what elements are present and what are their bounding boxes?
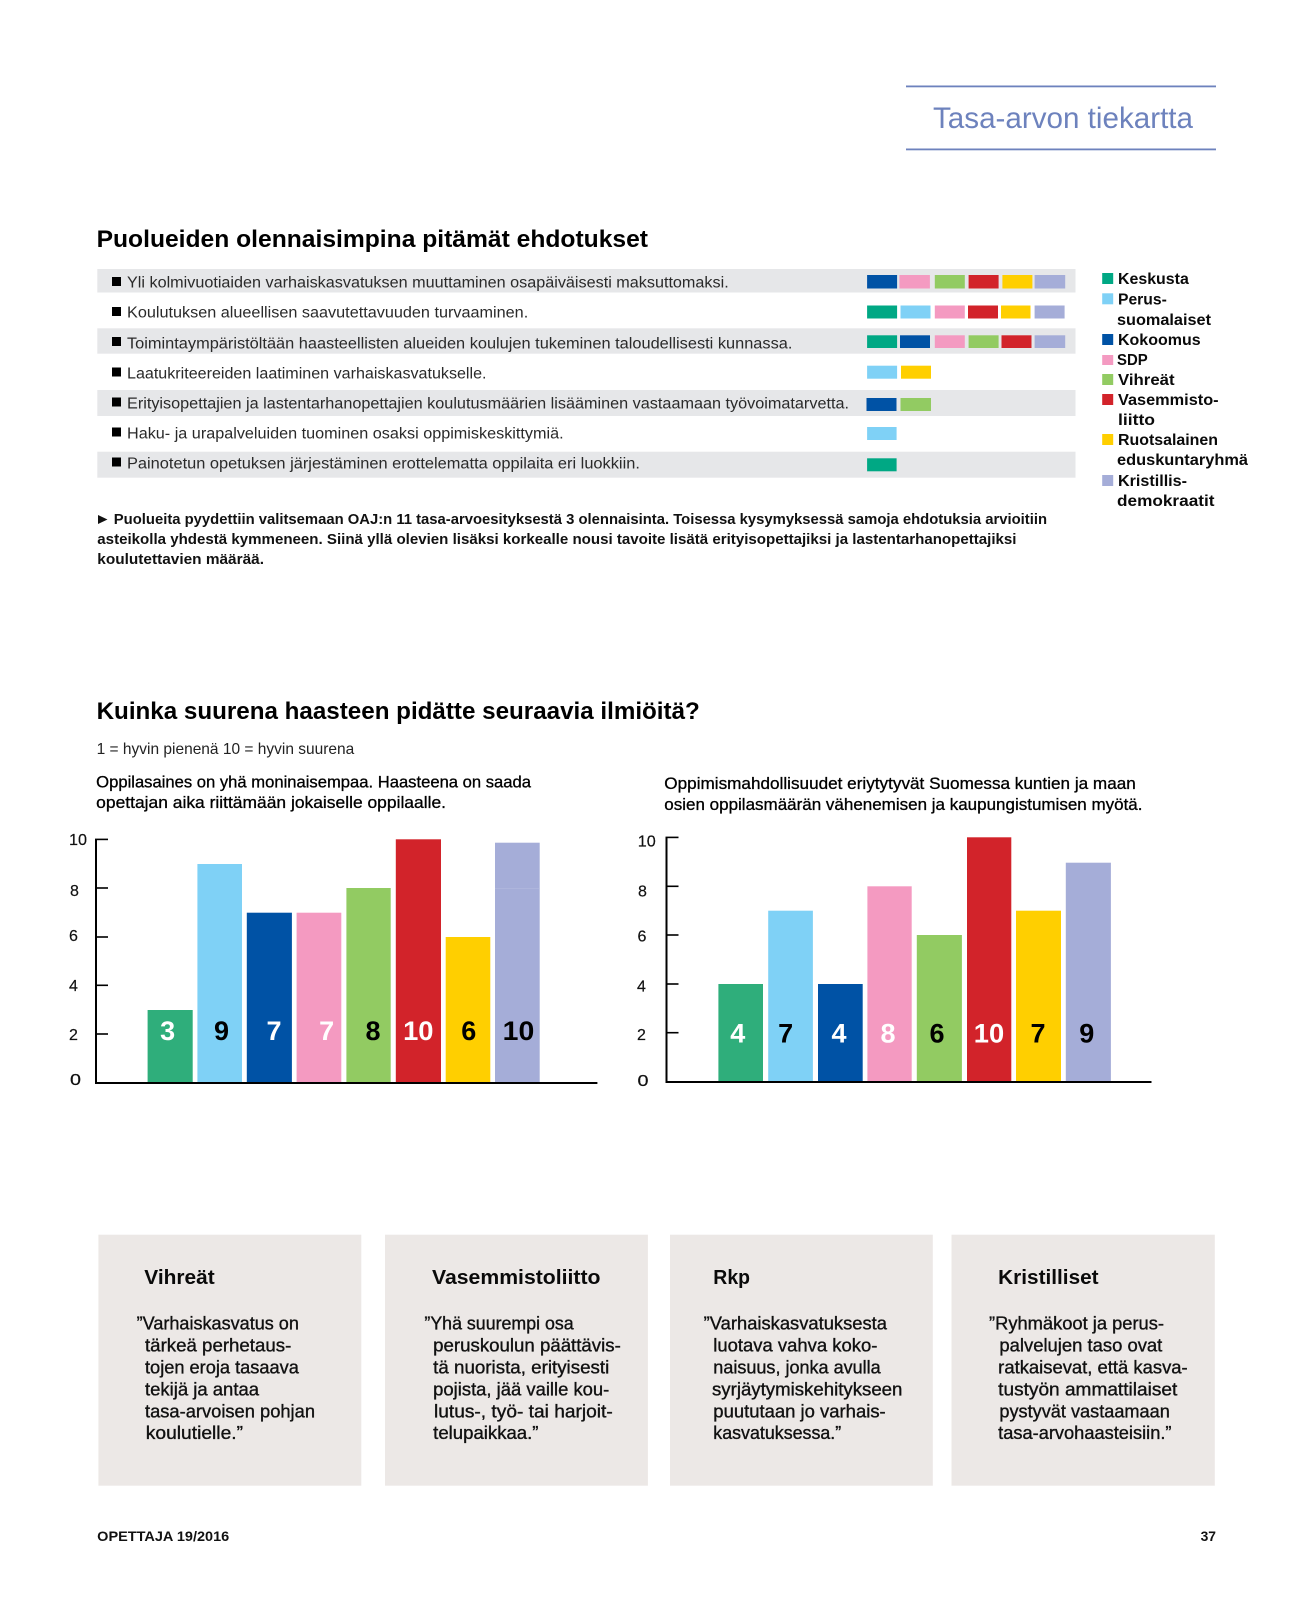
row 3 <box>97 328 1076 354</box>
left chart question <box>96 774 532 812</box>
row 5 <box>97 390 1076 416</box>
right chart question: osien oppilasmäärän vähenemisen ja kaupungistumisen myötä. <box>664 796 1142 814</box>
panel: Kristilliset: ”Ryhmäkoot ja perus- <box>989 1313 1164 1333</box>
right chart values: 7 <box>778 1019 793 1049</box>
bar chart: right <box>637 834 1152 1090</box>
left chart values: 3 <box>160 1016 175 1046</box>
header: Tasa-arvon tiekartta: Tasa-arvon tiekartta <box>933 102 1193 135</box>
panel: Kristilliset: palvelujen taso ovat <box>999 1335 1162 1355</box>
legend: parties: demokraatit <box>1117 493 1215 510</box>
row 4 <box>112 365 931 382</box>
right chart axis labels: 10 <box>638 834 656 850</box>
panel: Kristilliset: tasa-arvohaasteisiin.” <box>998 1423 1172 1443</box>
left chart axis labels: 10 <box>69 832 87 849</box>
right chart axis labels: 0 <box>638 1073 649 1090</box>
panel: Vasemmistoliitto <box>385 1235 648 1486</box>
note text: asteikolla yhdestä kymmeneen. Siinä yllä olevien lisäksi korkealle nousi tavoite lisätä erityisopettajiksi ja lastentarhanopettajiksi <box>97 532 1016 548</box>
legend: parties: Vihreät <box>1118 372 1175 389</box>
panel: proposals table <box>97 269 1076 478</box>
right chart axis labels: 6 <box>638 928 646 946</box>
panel: Kristilliset: tustyön ammattilaiset <box>998 1379 1177 1399</box>
heading: party proposals: Puolueiden olennaisimpina pitämät ehdotukset <box>97 226 648 253</box>
heading: challenge question: Kuinka suurena haasteen pidätte seuraavia ilmiöitä? <box>97 698 700 725</box>
right chart question <box>664 775 1142 814</box>
panel: Vihreät: tärkeä perhetaus- <box>145 1335 291 1355</box>
legend: parties: SDP <box>1117 352 1148 369</box>
left chart axis labels: 2 <box>69 1027 78 1044</box>
panel: Rkp: naisuus, jonka avulla <box>713 1357 882 1377</box>
panel: Kristilliset <box>952 1235 1215 1486</box>
left chart values: 10 <box>403 1016 433 1046</box>
left chart bars <box>148 839 540 1082</box>
row 6: Haku- ja urapalveluiden tuominen osaksi oppimiskeskittymiä. <box>127 425 564 442</box>
right chart values: 6 <box>929 1019 945 1049</box>
panel: Rkp: kasvatuksessa.” <box>713 1423 841 1443</box>
panel: Kristilliset: pystyvät vastaamaan <box>999 1401 1170 1421</box>
legend: parties: Keskusta <box>1118 271 1189 288</box>
legend: parties: Ruotsalainen <box>1118 432 1218 449</box>
left chart values: 9 <box>214 1016 229 1046</box>
row 3: Toimintaympäristöltään haasteellisten alueiden koulujen tukeminen taloudellisesti kunnassa. <box>127 336 792 353</box>
legend: parties: Kokoomus <box>1118 332 1201 349</box>
panel: Vihreät <box>98 1235 361 1486</box>
legend: parties: Kristillis- <box>1118 473 1187 490</box>
panel: Kristilliset: Kristilliset <box>998 1267 1099 1289</box>
left chart axis labels <box>69 832 87 1089</box>
left chart values: 6 <box>461 1016 476 1046</box>
panel: Vasemmistoliitto: lutus-, työ- tai harjoit- <box>434 1401 613 1421</box>
panel: Vasemmistoliitto: tä nuorista, erityisesti <box>433 1357 609 1377</box>
legend: parties <box>1102 271 1248 510</box>
legend: parties: eduskuntaryhmä <box>1117 452 1248 469</box>
legend: parties: suomalaiset <box>1117 312 1212 329</box>
note text: Puolueita pyydettiin valitsemaan OAJ:n 11 tasa-arvoesityksestä 3 olennaisinta. Toisessa kysymyksessä samoja ehdotuksia arvioitiin <box>114 512 1047 528</box>
panel: Vasemmistoliitto: pojista, jää vaille kou- <box>433 1379 609 1399</box>
legend: parties: Vasemmisto- <box>1118 392 1219 409</box>
right chart axis labels <box>637 834 656 1090</box>
panel: Rkp <box>670 1235 933 1486</box>
panel: Vasemmistoliitto: ”Yhä suurempi osa <box>424 1313 575 1333</box>
panel: Rkp: puututaan jo varhais- <box>713 1401 886 1421</box>
right chart values: 10 <box>974 1019 1004 1049</box>
right chart values: 4 <box>831 1019 847 1049</box>
right chart values <box>730 1019 1094 1049</box>
scale explanation: 1 = hyvin pienenä 10 = hyvin suurena <box>97 741 354 758</box>
panel: Vihreät: tojen eroja tasaava <box>145 1357 300 1377</box>
panel: Rkp: syrjäytymiskehitykseen <box>712 1379 902 1399</box>
panel: Vihreät: ”Varhaiskasvatus on <box>137 1313 299 1333</box>
row 7: Painotetun opetuksen järjestäminen erottelematta oppilaita eri luokkiin. <box>127 455 640 472</box>
panel: Rkp: Rkp <box>713 1267 750 1289</box>
left chart question: Oppilasaines on yhä moninaisempaa. Haasteena on saada <box>96 774 532 792</box>
row 7 <box>97 452 1076 478</box>
panel: Vihreät: Vihreät <box>144 1267 215 1289</box>
left chart values <box>160 1016 534 1046</box>
footer: magazine issue: OPETTAJA 19/2016 <box>97 1528 229 1544</box>
panel: Kristilliset: ratkaisevat, että kasva- <box>998 1357 1188 1377</box>
row 2: Koulutuksen alueellisen saavutettavuuden turvaaminen. <box>127 304 528 321</box>
legend: parties: liitto <box>1118 412 1155 429</box>
panel: Rkp: ”Varhaiskasvatuksesta <box>704 1313 888 1333</box>
left chart axes <box>95 839 597 1084</box>
left chart values: 10 <box>503 1016 534 1046</box>
right chart axis labels: 2 <box>637 1027 646 1044</box>
right chart axis labels: 4 <box>637 978 646 996</box>
right chart values: 8 <box>880 1019 896 1049</box>
footer: page number: 37 <box>1201 1528 1216 1544</box>
right chart values: 9 <box>1079 1019 1094 1049</box>
panel: Vihreät: tekijä ja antaa <box>145 1379 260 1399</box>
panel: Vihreät: tasa-arvoisen pohjan <box>145 1401 315 1421</box>
row 6 <box>112 425 897 442</box>
row 5: Erityisopettajien ja lastentarhanopettajien koulutusmäärien lisääminen vastaamaan työvoimatarvetta. <box>127 395 849 412</box>
note text <box>97 512 1047 568</box>
panel: Vasemmistoliitto: peruskoulun päättävis- <box>433 1335 621 1355</box>
right chart values: 7 <box>1030 1019 1046 1049</box>
panel: Vasemmistoliitto: telupaikkaa.” <box>433 1423 539 1443</box>
bar chart: left <box>69 832 597 1089</box>
panel: Vihreät: koulutielle.” <box>146 1423 243 1443</box>
left chart axis labels: 6 <box>69 928 78 945</box>
row 4: Laatukriteereiden laatiminen varhaiskasvatukselle. <box>127 365 486 382</box>
right chart values: 4 <box>730 1019 745 1049</box>
note text: koulutettavien määrää. <box>97 552 264 568</box>
left chart axis labels: 4 <box>69 978 78 995</box>
left chart values: 8 <box>365 1016 381 1046</box>
left chart axis labels: 0 <box>70 1072 81 1089</box>
panel: Vasemmistoliitto: Vasemmistoliitto <box>432 1267 600 1289</box>
row 1 <box>97 269 1076 292</box>
left chart axis labels: 8 <box>70 883 79 900</box>
row 1: Yli kolmivuotiaiden varhaiskasvatuksen muuttaminen osapäiväisesti maksuttomaksi. <box>127 274 729 291</box>
right chart axes <box>666 837 1152 1083</box>
right chart question: Oppimismahdollisuudet eriytytyvät Suomessa kuntien ja maan <box>664 775 1136 793</box>
right chart bars <box>718 837 1111 1081</box>
left chart question: opettajan aika riittämään jokaiselle oppilaalle. <box>96 794 446 812</box>
right chart axis labels: 8 <box>638 884 647 900</box>
panel: Rkp: luotava vahva koko- <box>713 1335 877 1355</box>
row 2 <box>112 304 1065 321</box>
left chart values: 7 <box>319 1016 334 1046</box>
legend: parties: Perus- <box>1118 291 1167 308</box>
left chart values: 7 <box>266 1016 282 1046</box>
